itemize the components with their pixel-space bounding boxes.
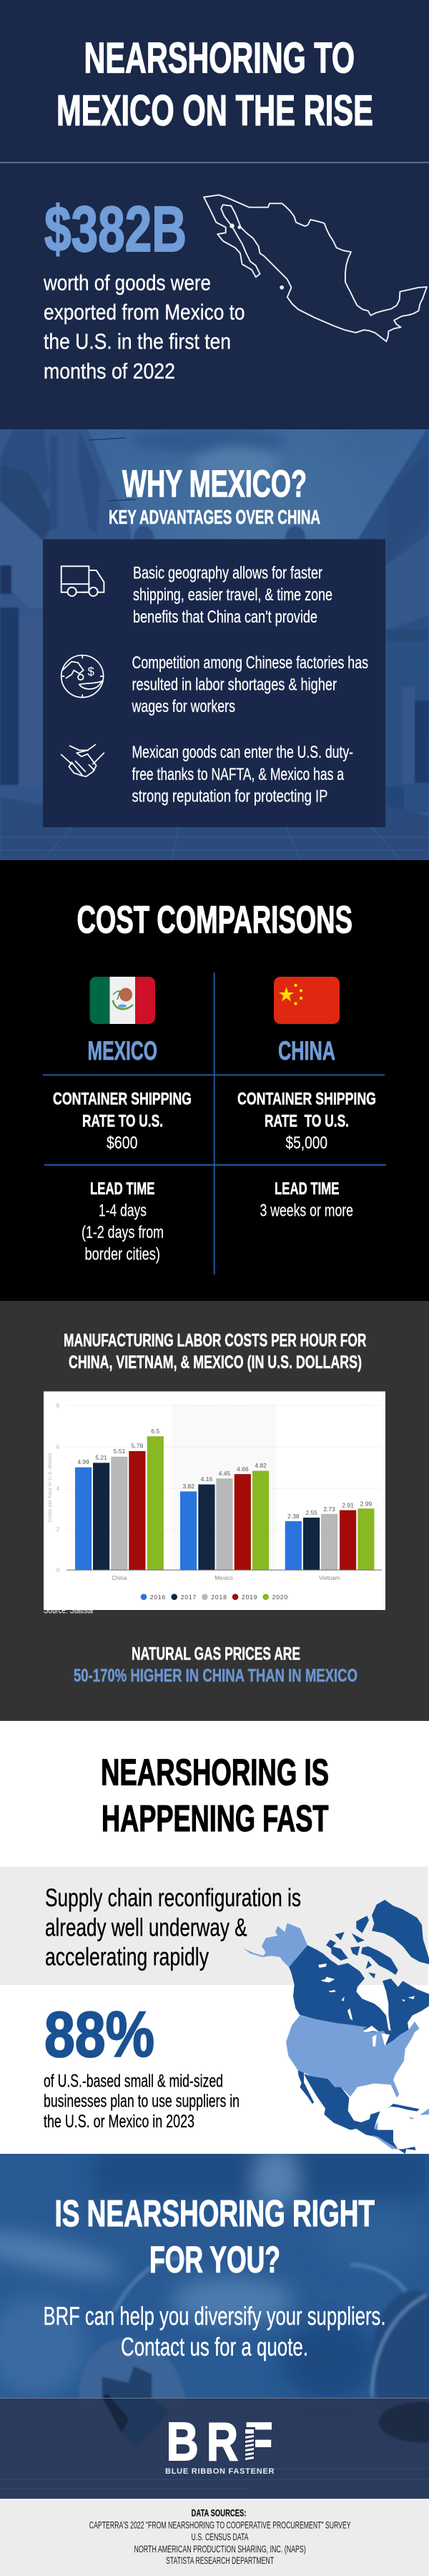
category labels: Mexico (214, 1575, 233, 1581)
category labels: Vietnam (319, 1575, 340, 1581)
sources list: STATISTA RESEARCH DEPARTMENT (166, 2555, 274, 2566)
text block: businesses: businesses plan to use suppliers in (44, 2091, 240, 2111)
logo: Blue Ribbon Fastener: R (207, 2411, 238, 2472)
text block: NAFTA: strong reputation for protecting IP (132, 787, 327, 806)
text block: export description: months of 2022 (44, 358, 175, 384)
text block: contact (43, 2301, 386, 2361)
icon: Mexico outline map (204, 195, 427, 341)
Alaska and United States (243, 1923, 429, 2149)
bar value labels: 2.38 (287, 1513, 300, 1520)
heading: HAPPENING FAST (102, 1798, 329, 1840)
bar chart (44, 1391, 385, 1610)
bar value labels: 2.55 (305, 1509, 317, 1516)
bar value labels: 2.99 (360, 1500, 372, 1507)
panel: data sources (0, 2499, 429, 2576)
heading: labor cost chart title (64, 1331, 366, 1372)
lakes (318, 1963, 415, 2046)
category labels (112, 1575, 340, 1581)
bar value labels: 4.16 (201, 1475, 212, 1483)
text block: geography: shipping, easier travel, & time zone (133, 585, 332, 605)
text block: businesses: of U.S.-based small & mid-sized (44, 2071, 223, 2091)
icon: wages hand and coin: $ (87, 665, 94, 678)
title (56, 34, 373, 135)
logo: Blue Ribbon Fastener: B (167, 2411, 199, 2472)
logo: Blue Ribbon Fastener (165, 2411, 275, 2476)
legend: 2017 (181, 1594, 196, 1601)
column label: China: CHINA (278, 1036, 335, 1065)
text block: NAFTA: free thanks to NAFTA, & Mexico has a (132, 765, 344, 784)
Mexico lead time: 1-4 days (99, 1201, 147, 1221)
text block: labor (132, 653, 368, 716)
bar value labels: 3.82 (182, 1483, 194, 1490)
panel: nearshoring is happening fast (0, 1721, 429, 2154)
icon: wages hand and coin (61, 655, 104, 698)
bar value labels: 2.73 (323, 1506, 335, 1513)
panel: advantages box (43, 540, 385, 827)
text block: supply chain (45, 1883, 301, 1971)
icon: China flag (274, 977, 340, 1024)
table grid lines (43, 972, 386, 1274)
bar chart: 2 (56, 1526, 60, 1533)
legend: 2020 (272, 1594, 287, 1601)
text block: geography: Basic geography allows for faster (133, 564, 322, 582)
text block: geography: benefits that China can't provide (133, 608, 317, 627)
map: North America (243, 1900, 429, 2154)
bar chart: 6 (56, 1444, 60, 1450)
text block: businesses: the U.S. or Mexico in 2023 (44, 2112, 194, 2132)
logo: Blue Ribbon Fastener: BLUE RIBBON FASTENER (165, 2467, 275, 2476)
photo background: colonial street (0, 427, 429, 860)
bar chart: 8 (56, 1402, 60, 1409)
photo background: fasteners (0, 2147, 429, 2499)
heading (101, 1752, 329, 1840)
heading: Why Mexico: WHY MEXICO? (122, 463, 307, 505)
text block: export description: the U.S. in the first ten (44, 329, 231, 353)
Mexico shipping rate: $600 (107, 1133, 137, 1153)
Canada, Mexico, Central America and Greenland (289, 1900, 429, 2154)
text block: NAFTA (132, 743, 353, 806)
bar value labels: 5.21 (95, 1454, 107, 1461)
Mexico lead time (82, 1179, 164, 1264)
Mexico shipping rate: CONTAINER SHIPPING (53, 1089, 192, 1109)
China lead time: 3 weeks or more (260, 1201, 353, 1221)
China shipping rate: RATE TO U.S. (265, 1112, 349, 1131)
bar value labels: 4.45 (219, 1470, 230, 1477)
sources list (89, 2519, 351, 2566)
bar value labels (77, 1428, 372, 1520)
legend (141, 1594, 287, 1601)
heading: is nearshoring right for you (54, 2193, 375, 2281)
big stat: 88%: 88% (44, 1999, 154, 2071)
text block: export description: exported from Mexico to (44, 299, 245, 325)
text block: contact: Contact us for a quote. (121, 2332, 308, 2361)
left building (0, 429, 136, 809)
callout: natural gas prices: NATURAL GAS PRICES ARE (132, 1644, 300, 1664)
icon: handshake (61, 745, 104, 776)
bar value labels: 5.78 (132, 1443, 143, 1450)
panel: why Mexico (0, 427, 429, 860)
panel: labor costs (0, 1301, 429, 1721)
China shipping rate (237, 1089, 376, 1153)
icon: Mexico flag (90, 977, 155, 1024)
text block: labor: wages for workers (132, 697, 235, 716)
Mexico lead time: border cities) (84, 1245, 160, 1264)
bar chart: Costs per hour in U.S. dollars (48, 1453, 53, 1523)
bar value labels: 5.51 (114, 1448, 125, 1455)
dark logo band (0, 2398, 429, 2499)
bar chart: 0 (56, 1567, 60, 1574)
domes (133, 525, 154, 540)
China lead time: LEAD TIME (275, 1179, 339, 1199)
big stat: $382B: $382B (44, 194, 187, 265)
text block: businesses (44, 2071, 240, 2132)
China shipping rate: $5,000 (286, 1133, 327, 1153)
Mexico lead time: LEAD TIME (90, 1179, 154, 1199)
bar value labels: 4.99 (77, 1458, 89, 1465)
bar value labels: 6.5 (151, 1428, 159, 1435)
text block: export description (43, 270, 245, 384)
sources list: NORTH AMERICAN PRODUCTION SHARING, INC. (NAPS) (134, 2543, 306, 2555)
heading: NEARSHORING IS (101, 1752, 329, 1793)
bar value labels: 4.66 (237, 1465, 249, 1473)
icon: truck (61, 566, 104, 596)
text block: labor: resulted in labor shortages & higher (132, 675, 337, 694)
source note: Source: Statista (44, 1604, 93, 1616)
text block: supply chain: accelerating rapidly (45, 1942, 209, 1971)
Mexico shipping rate: RATE TO U.S. (82, 1112, 163, 1131)
sources heading: DATA SOURCES: (192, 2507, 246, 2519)
subheading: KEY ADVANTAGES OVER CHINA (109, 506, 320, 528)
China shipping rate: CONTAINER SHIPPING (237, 1089, 376, 1109)
category labels: China (112, 1575, 127, 1581)
Mexico shipping rate (53, 1089, 192, 1153)
bar chart: 4 (56, 1485, 60, 1492)
text block: export description: worth of goods were (43, 270, 211, 295)
Mexico lead time: (1-2 days from (82, 1223, 164, 1242)
bars: China (75, 1436, 164, 1570)
callout: natural gas prices (74, 1644, 358, 1686)
panel: hero (0, 0, 429, 429)
panel: call to action (0, 2147, 429, 2499)
heading: is nearshoring right for you: FOR YOU? (149, 2240, 280, 2281)
legend: 2019 (242, 1594, 257, 1601)
column label: Mexico: MEXICO (87, 1036, 157, 1065)
text block: geography (133, 564, 332, 627)
bars: Vietnam (285, 1508, 375, 1570)
sources list: U.S. CENSUS DATA (192, 2531, 249, 2542)
text block: supply chain: Supply chain reconfiguration is (45, 1883, 301, 1912)
panel: cost comparisons (0, 860, 429, 1301)
bar value labels: 2.91 (342, 1501, 354, 1508)
ground (0, 796, 429, 860)
legend: 2016 (150, 1594, 165, 1601)
legend: 2018 (211, 1594, 227, 1601)
text block: supply chain: already well underway & (45, 1913, 247, 1942)
China lead time (260, 1179, 353, 1221)
bar value labels: 4.82 (255, 1462, 267, 1469)
bars: Mexico (180, 1471, 269, 1570)
right building (354, 429, 429, 813)
logo: Blue Ribbon Fastener: F (244, 2411, 273, 2472)
